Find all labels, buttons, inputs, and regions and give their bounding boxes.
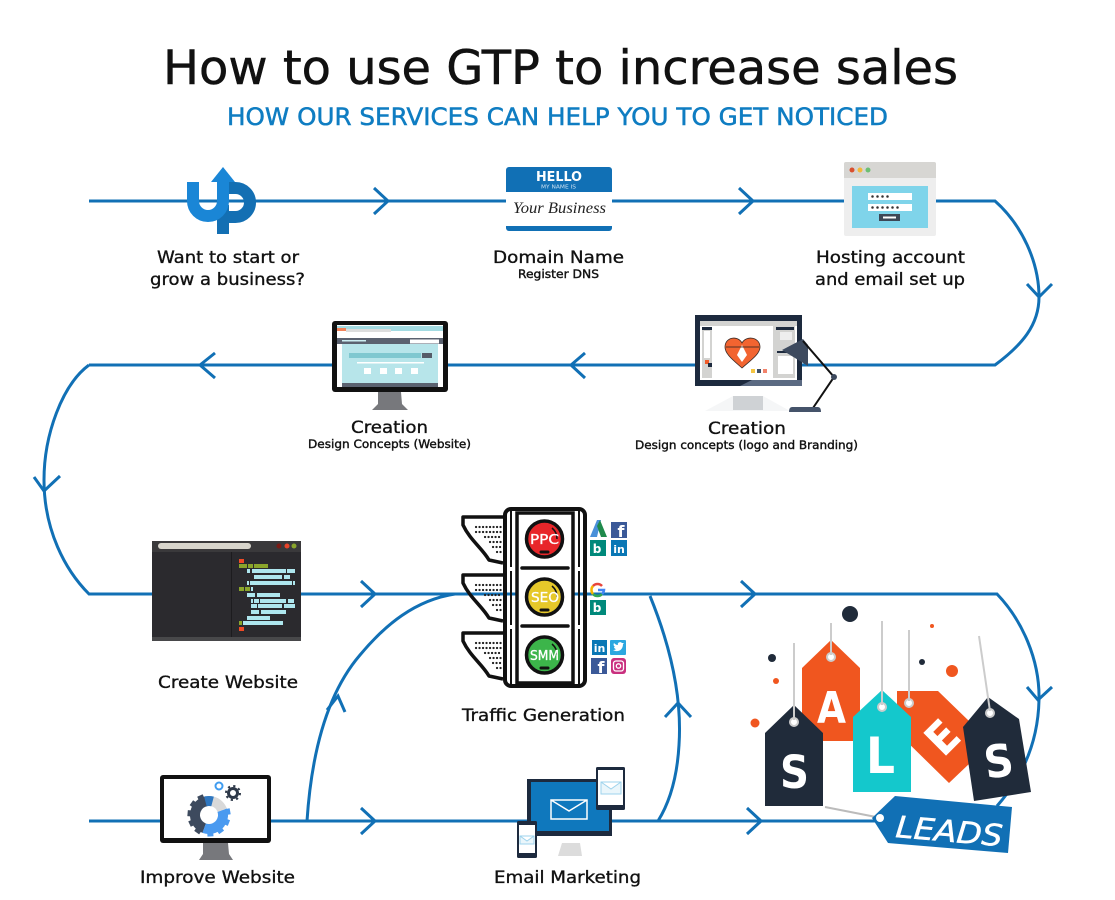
step: create website	[152, 541, 301, 693]
icons: social platforms	[590, 520, 627, 677]
label: Want to start or	[157, 248, 299, 268]
label	[815, 248, 965, 290]
icon: name tag: Your Business	[513, 200, 606, 217]
icon: bing	[590, 600, 606, 615]
icon: linkedin	[592, 640, 607, 655]
arrowheads	[34, 188, 1052, 834]
lamp: SMM: SMM	[530, 649, 559, 664]
sublabel: Design Concepts (Website)	[308, 437, 471, 451]
icon: login window	[844, 162, 936, 236]
graphic: sales tags	[750, 606, 1031, 854]
icon: facebook	[591, 658, 607, 677]
flow connectors	[34, 188, 1052, 834]
housing	[505, 509, 585, 686]
tag: leads	[825, 796, 1012, 854]
step: creation website	[308, 321, 471, 451]
lamp: SEO: SEO	[531, 591, 559, 606]
label: Create Website	[158, 673, 298, 693]
tag: second S: S	[981, 733, 1017, 790]
icon: twitter	[610, 640, 626, 655]
label: grow a business?	[150, 270, 305, 290]
label: Improve Website	[140, 868, 295, 888]
tag: S: S	[780, 746, 809, 799]
icon: facebook: f	[598, 658, 606, 677]
label: Hosting account	[816, 248, 965, 268]
step: improve website	[140, 775, 295, 888]
step: hosting account	[815, 162, 965, 290]
tag: E: E	[915, 710, 971, 766]
label: Creation	[351, 418, 428, 438]
icon: linkedin	[611, 540, 627, 556]
step: creation logo and branding	[635, 315, 858, 452]
decorative dots	[750, 606, 958, 728]
sublabel: Design concepts (logo and Branding)	[635, 438, 858, 452]
lamp: SEO	[526, 579, 562, 615]
tag: S	[765, 643, 823, 806]
icon: google	[591, 584, 604, 596]
icon: email devices	[517, 767, 625, 858]
icon: website monitor	[332, 321, 448, 410]
icon: gears monitor	[160, 775, 271, 860]
icon: name tag: MY NAME IS	[541, 184, 577, 190]
icon: bing ads	[590, 540, 606, 556]
label: Traffic Generation	[461, 706, 625, 726]
lamp: PPC	[526, 521, 562, 557]
label: Email Marketing	[494, 868, 641, 888]
label: Creation	[708, 419, 786, 439]
icon: adwords	[590, 520, 607, 537]
tag: A: A	[817, 683, 846, 734]
title: How to use GTP to increase sales	[163, 41, 958, 96]
visor dots	[476, 527, 501, 668]
label	[150, 248, 305, 290]
icon: linkedin: in	[613, 543, 625, 556]
icon: traffic light	[463, 509, 585, 686]
icon: bing ads: b	[593, 542, 602, 556]
step: traffic generation	[461, 509, 627, 726]
connector: branch to traffic	[307, 594, 455, 821]
tag: E	[897, 630, 971, 783]
tag: L: L	[866, 727, 895, 785]
lamp: SMM	[526, 637, 562, 673]
icon: name tag: HELLO	[536, 170, 582, 185]
visors	[463, 517, 503, 679]
tag: L	[853, 621, 911, 792]
icon: bing: b	[593, 601, 602, 615]
step: want to start or grow	[150, 167, 305, 290]
icon: design monitor with lamp	[695, 315, 837, 412]
icon: facebook	[611, 522, 627, 541]
step: domain name	[493, 167, 624, 281]
subtitle: HOW OUR SERVICES CAN HELP YOU TO GET NOTICED	[227, 103, 888, 131]
icon: linkedin: in	[594, 642, 605, 655]
label: and email set up	[815, 270, 965, 290]
connector: left bend into row 3	[44, 365, 1039, 806]
icon: facebook: f	[618, 522, 626, 541]
icon: name tag	[506, 167, 612, 232]
sublabel: Register DNS	[518, 267, 599, 281]
label: Domain Name	[493, 248, 624, 268]
housing inner	[517, 513, 573, 683]
connector: row 1 and right bend	[89, 201, 1039, 365]
icon: code window	[152, 541, 301, 641]
tag: A	[802, 623, 860, 741]
step: email marketing	[494, 767, 641, 888]
connector: branch from traffic	[650, 596, 680, 821]
tag: leads: LEADS	[894, 810, 1004, 854]
tag: second S	[963, 636, 1031, 801]
lamp: PPC: PPC	[530, 533, 559, 548]
icon: up logo	[193, 167, 250, 234]
connector: bottom row	[89, 820, 880, 822]
icon: instagram	[611, 658, 626, 674]
